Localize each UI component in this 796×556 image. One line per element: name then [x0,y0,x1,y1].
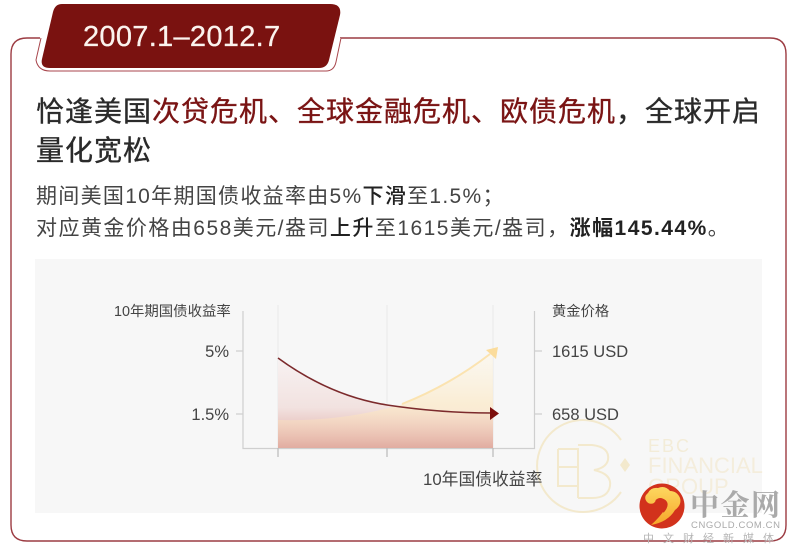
axes [236,305,542,457]
watermark: cngold logo: 中金网 [690,483,782,524]
tab label: 2007.1–2012.7 [83,21,280,53]
chart panel [35,259,763,513]
body text: 期间美国10年期国债收益率由5%下滑至1.5%； [36,185,505,208]
watermark: EBC logo [537,420,763,512]
area: yield [278,358,493,448]
watermark: EBC logo: FINANCIAL [648,453,763,478]
area: gold [278,352,493,448]
right axis title: 黄金价格 [552,303,609,320]
right axis labels [552,343,628,424]
watermark: EBC logo: GROUP [648,474,729,499]
heading: 量化宽松 [36,135,152,166]
body text: 对应黄金价格由658美元/盎司上升至1615美元/盎司，涨幅145.44%。 [36,217,730,240]
line: bond yield [278,358,499,420]
line: gold price [402,347,498,404]
right axis labels: 658 USD [552,406,619,424]
left axis title: 10年期国债收益率 [114,303,231,320]
watermark: cngold logo [640,483,783,545]
right axis labels: 1615 USD [552,343,628,361]
left axis labels: 1.5% [191,406,229,424]
watermark: EBC logo: EBC [648,436,691,456]
date tab [36,4,341,71]
watermark: cngold logo: CNGOLD.COM.CN [691,520,781,531]
x axis label: 10年国债收益率 [423,470,542,489]
left axis labels: 5% [205,343,229,361]
watermark: cngold logo: 中文财经新媒体 [643,531,783,545]
heading: 恰逢美国次贷危机、全球金融危机、欧债危机，全球开启 [36,96,761,127]
left axis labels [191,343,229,424]
